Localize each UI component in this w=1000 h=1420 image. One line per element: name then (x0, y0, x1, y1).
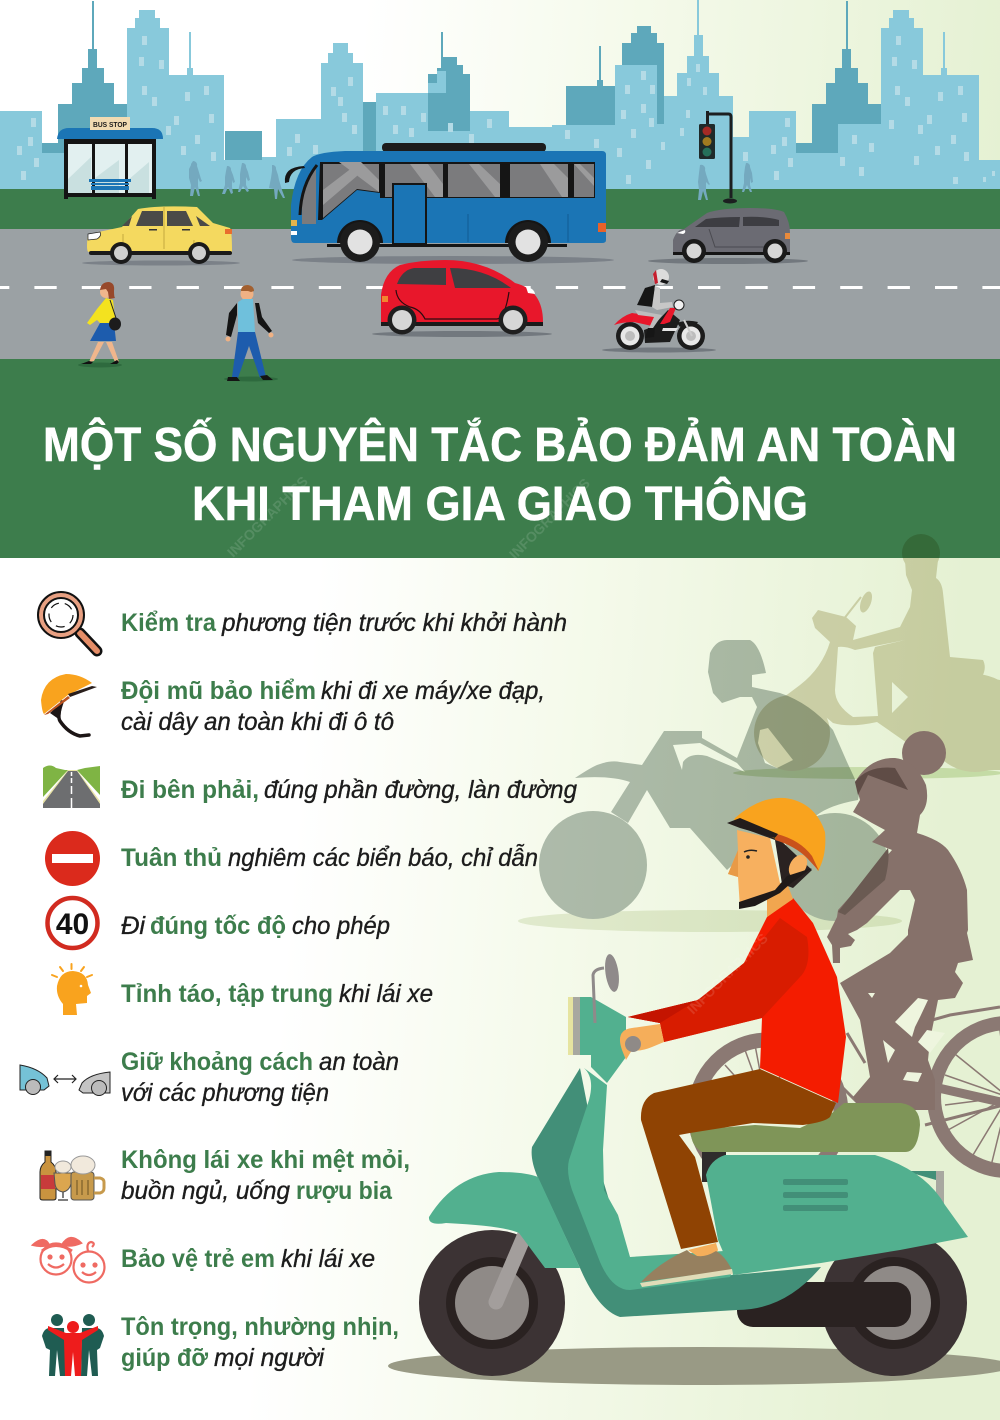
ankle (688, 1243, 718, 1259)
rule 4: obey signs (45, 831, 538, 886)
road (0, 229, 1000, 359)
icon: no entry sign (45, 831, 100, 886)
text: Tỉnh táo, tập trung (121, 980, 333, 1008)
hair (737, 826, 812, 888)
text: giúp đỡ (121, 1344, 208, 1372)
man pedestrian (224, 285, 278, 382)
icon: speed limit 40 sign (48, 898, 98, 948)
text: khi lái xe (281, 1245, 375, 1273)
sweater (628, 898, 846, 1103)
seat (691, 1103, 920, 1152)
front wheel (419, 1230, 565, 1376)
chin strap and beard (739, 868, 812, 909)
icon: cars and double arrow (20, 1065, 110, 1096)
text (121, 912, 390, 940)
rear body (706, 1155, 968, 1275)
text: Không lái xe khi mệt mỏi, (121, 1146, 410, 1174)
steering head (574, 997, 626, 1083)
text: Tuân thủ (121, 844, 222, 872)
rule 2: helmet (41, 674, 545, 736)
front fender (429, 1172, 580, 1268)
icon: three people (42, 1314, 104, 1376)
bicycle wheels (695, 1007, 1000, 1186)
icon: helmet (41, 674, 97, 736)
traffic light (699, 111, 737, 204)
city skyline (0, 0, 1000, 189)
text: đúng phần đường, làn đường (264, 776, 577, 804)
icon: bottle and beer (40, 1151, 104, 1200)
title banner (0, 359, 1000, 558)
icon: road (43, 766, 100, 808)
title (43, 417, 957, 531)
text: mọi người (214, 1344, 325, 1372)
text: buồn ngủ, uống (121, 1177, 290, 1205)
main scooter shadow (388, 1347, 1000, 1385)
engine (737, 1282, 911, 1327)
upper grass strip (0, 189, 1000, 229)
blue bus (285, 143, 614, 264)
icon: speed limit 40 sign: 40 (56, 908, 89, 941)
faded dirt bike silhouette (518, 640, 902, 932)
rule 1: vehicle check (38, 592, 567, 651)
text: đúng tốc độ (150, 912, 286, 940)
icon: magnifying glass (38, 592, 97, 651)
vents (783, 1179, 848, 1211)
mirror (593, 953, 621, 1023)
rule 8: no alcohol or fatigue (40, 1146, 410, 1205)
watermarks: INFOGRAPHICS (224, 473, 311, 560)
title: KHI THAM GIA GIAO THÔNG (192, 476, 808, 531)
text (121, 776, 577, 804)
text (121, 843, 538, 872)
neck (767, 883, 793, 917)
text (121, 1245, 375, 1273)
text: Kiểm tra (121, 609, 217, 637)
hand (620, 1024, 664, 1060)
watermarks (224, 473, 771, 1017)
text: Đội mũ bảo hiểm (121, 677, 316, 705)
text: rượu bia (296, 1177, 393, 1205)
watermarks: INFOGRAPHICS (506, 475, 593, 562)
rule 7: keep distance (20, 1048, 399, 1107)
grey car (648, 208, 808, 264)
main rider (620, 798, 846, 1287)
text: với các phương tiện (121, 1079, 329, 1107)
text (121, 1146, 410, 1205)
helmet (734, 798, 825, 871)
bus stop sign: BUS STOP (93, 120, 127, 129)
frame dark (532, 1068, 821, 1317)
text (121, 1313, 399, 1372)
text: khi đi xe máy/xe đạp, (321, 677, 545, 705)
bus stop (57, 117, 163, 199)
text (121, 1048, 399, 1107)
text: Bảo vệ trẻ em (121, 1245, 275, 1273)
text: nghiêm các biển báo, chỉ dẫn (228, 843, 538, 872)
rear wheel (821, 1230, 967, 1376)
rule 9: protect children (33, 1238, 375, 1282)
cyclist woman silhouette (827, 731, 973, 1110)
text: khi lái xe (339, 980, 433, 1008)
main scooter (419, 953, 968, 1376)
text: cho phép (292, 912, 390, 940)
red car (372, 260, 552, 337)
motorbike rider (602, 269, 716, 352)
text (121, 677, 545, 736)
trousers (641, 1069, 836, 1249)
leg shield (568, 1068, 740, 1290)
shoe (641, 1250, 732, 1282)
icon: children faces (33, 1238, 104, 1282)
woman pedestrian (78, 282, 122, 368)
text: cài dây an toàn khi đi ô tô (121, 708, 394, 736)
watermarks: INFOGRAPHICS (684, 930, 771, 1017)
rear rack (905, 1171, 944, 1205)
text: an toàn (319, 1048, 399, 1076)
yellow car (82, 206, 240, 266)
text: Giữ khoảng cách (121, 1048, 313, 1076)
text: Đi bên phải, (121, 776, 259, 804)
rows of safety rules (20, 592, 577, 1376)
rule 5: speed limit (48, 898, 390, 948)
icon: alert head (52, 964, 92, 1015)
text: Đi (121, 912, 146, 940)
helmet visor (727, 818, 778, 838)
faded pedestrians in background (189, 161, 753, 200)
face (728, 830, 780, 908)
text: phương tiện trước khi khởi hành (221, 609, 567, 637)
rule 10: respect others (42, 1313, 399, 1376)
rule 6: stay alert (52, 964, 433, 1015)
rule 3: keep right (43, 766, 577, 808)
faded beige scooter silhouette (733, 534, 1000, 779)
text: Tôn trọng, nhường nhịn, (121, 1313, 399, 1341)
fork (496, 1232, 526, 1302)
